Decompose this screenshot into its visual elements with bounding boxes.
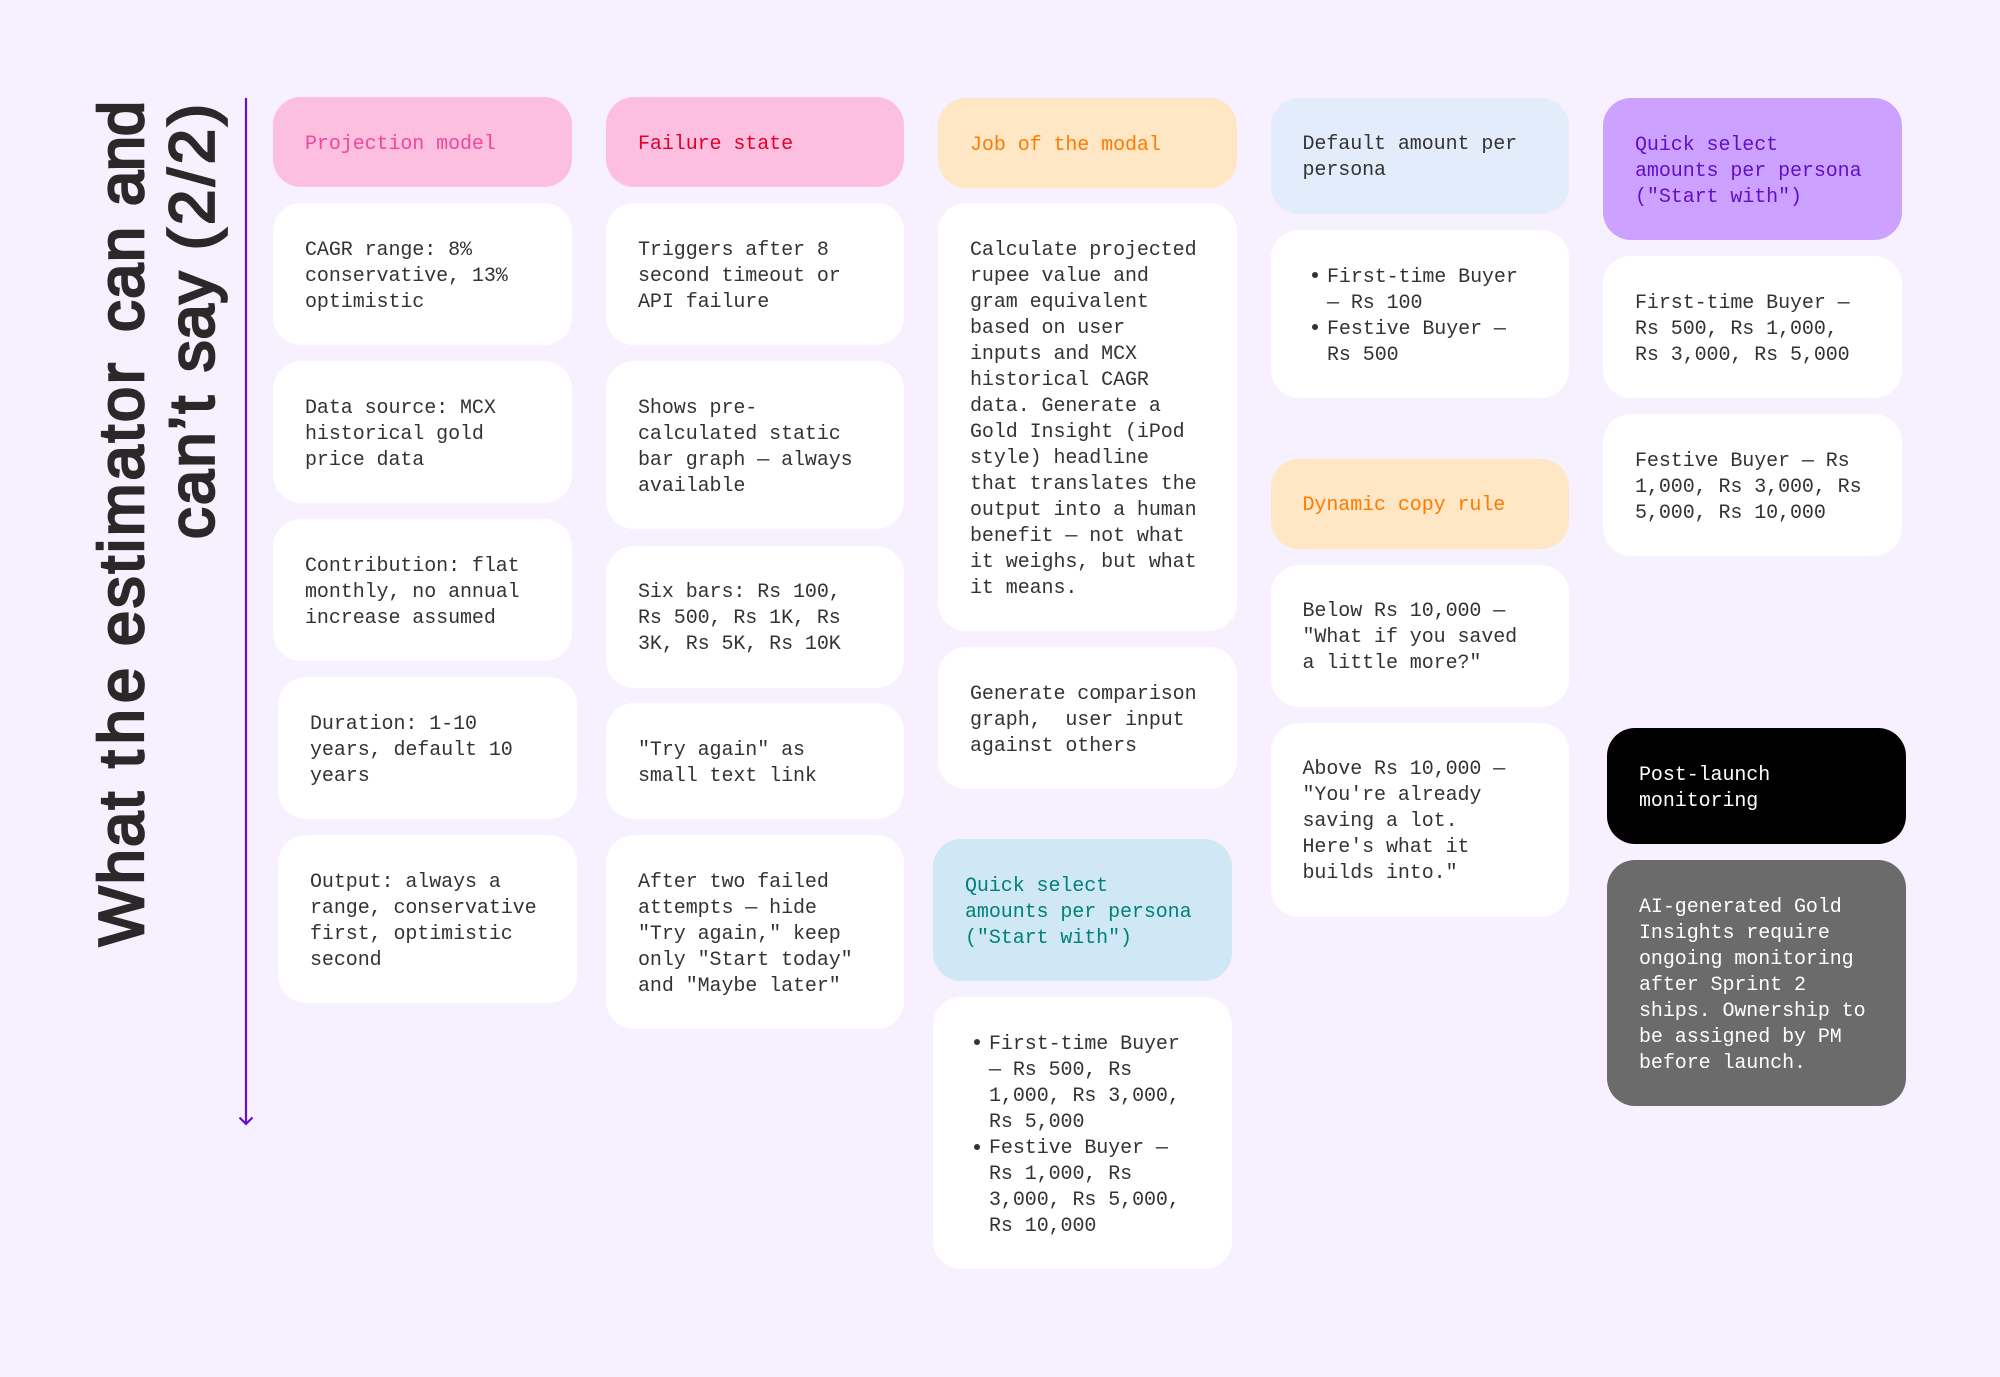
card: trigger	[606, 203, 904, 345]
card: output: Output: always a range, conservative first, optimistic second	[310, 870, 537, 972]
arrow: vertical timeline	[238, 98, 254, 1126]
card: contribution	[273, 519, 572, 661]
card: try again	[606, 703, 904, 819]
card: calculate	[938, 203, 1237, 631]
title: can’t	[158, 396, 228, 539]
card: comparison graph: Generate comparison graph, user input against others	[970, 682, 1197, 758]
card: comparison graph	[938, 647, 1237, 789]
panel: dynamic copy rule header: Dynamic copy rule	[1302, 494, 1505, 517]
card: above 10000	[1271, 723, 1569, 917]
title: estimator	[87, 363, 157, 646]
card: contribution: Contribution: flat monthly, no annual increase assumed	[305, 554, 520, 630]
panel: default amount header	[1271, 98, 1569, 214]
panel: dynamic copy rule header	[1271, 459, 1569, 549]
card: static bar graph: Shows pre- calculated static bar graph — always available	[638, 396, 853, 498]
card: below 10000	[1271, 565, 1569, 707]
card: first-time buyer amounts: First-time Buyer — Rs 500, Rs 1,000, Rs 3,000, Rs 5,000	[1635, 292, 1850, 366]
card: post-launch monitoring detail	[1607, 860, 1906, 1106]
panel: failure state header: Failure state	[638, 132, 793, 156]
card: failed attempts: After two failed attempts — hide "Try again," keep only "Start today" and "Maybe later"	[638, 870, 853, 998]
panel: quick select header (teal)	[933, 839, 1232, 981]
panel: post-launch monitoring header	[1607, 728, 1906, 844]
panel: quick select header (teal): Quick select amounts per persona ("Start with")	[965, 874, 1192, 950]
card: six bars: Six bars: Rs 100, Rs 500, Rs 1K, Rs 3K, Rs 5K, Rs 10K	[638, 580, 841, 656]
panel: post-launch monitoring header: Post-launch monitoring	[1639, 764, 1770, 812]
card: below 10000: Below Rs 10,000 — "What if you saved a little more?"	[1302, 600, 1517, 675]
card: above 10000: Above Rs 10,000 — "You're already saving a lot. Here's what it builds into."	[1302, 758, 1505, 885]
card: quick select list: First-time Buyer — Rs 500, Rs 1,000, Rs 3,000, Rs 5,000 Festive Buyer — Rs 1,000, Rs 3,000, Rs 5,000, Rs 10,000	[989, 1032, 1180, 1238]
card: default amount list	[1271, 230, 1569, 398]
card: festive buyer amounts	[1603, 414, 1902, 556]
card: default amount list: First-time Buyer — Rs 100 Festive Buyer — Rs 500	[1327, 266, 1518, 366]
card: data source	[273, 361, 572, 503]
card: CAGR range	[273, 203, 572, 345]
card: duration: Duration: 1-10 years, default 10 years	[310, 712, 513, 788]
title	[87, 101, 228, 948]
panel: projection model header: Projection model	[305, 132, 496, 156]
title: and	[87, 101, 157, 206]
panel: default amount header: Default amount per persona	[1302, 133, 1517, 182]
title: What	[87, 792, 157, 946]
card: first-time buyer amounts	[1603, 256, 1902, 398]
panel: projection model header	[273, 97, 572, 187]
card: post-launch monitoring detail: AI-generated Gold Insights require ongoing monitoring after Sprint 2 ships. Ownership to be assigned by PM before launch.	[1639, 896, 1866, 1074]
card: data source: Data source: MCX historical gold price data	[305, 396, 496, 472]
card: static bar graph	[606, 361, 904, 529]
card: duration	[278, 677, 577, 819]
panel: quick select header (purple)	[1603, 98, 1902, 240]
card: quick select list	[933, 997, 1232, 1269]
card: failed attempts	[606, 835, 904, 1029]
card: calculate: Calculate projected rupee value and gram equivalent based on user inputs and MCX historical CAGR data. Generate a Gold Insight (iPod style) headline that translates the output into a human benefit — not what it weighs, but what it means.	[970, 238, 1197, 600]
card: trigger: Triggers after 8 second timeout or API failure	[638, 238, 841, 314]
title: say	[158, 272, 228, 372]
panel: failure state header	[606, 97, 904, 187]
title: can	[87, 227, 157, 332]
card: try again: "Try again" as small text link	[638, 738, 817, 788]
card: output	[278, 835, 577, 1003]
card: six bars	[606, 546, 904, 688]
title: the	[87, 668, 157, 768]
panel: job of the modal header: Job of the modal	[970, 134, 1161, 156]
card: CAGR range: CAGR range: 8% conservative, 13% optimistic	[305, 238, 508, 314]
panel: quick select header (purple): Quick select amounts per persona ("Start with")	[1635, 134, 1862, 208]
panel: job of the modal header	[938, 98, 1237, 188]
card: festive buyer amounts: Festive Buyer — Rs 1,000, Rs 3,000, Rs 5,000, Rs 10,000	[1635, 450, 1862, 524]
title: (2/2)	[158, 104, 228, 250]
